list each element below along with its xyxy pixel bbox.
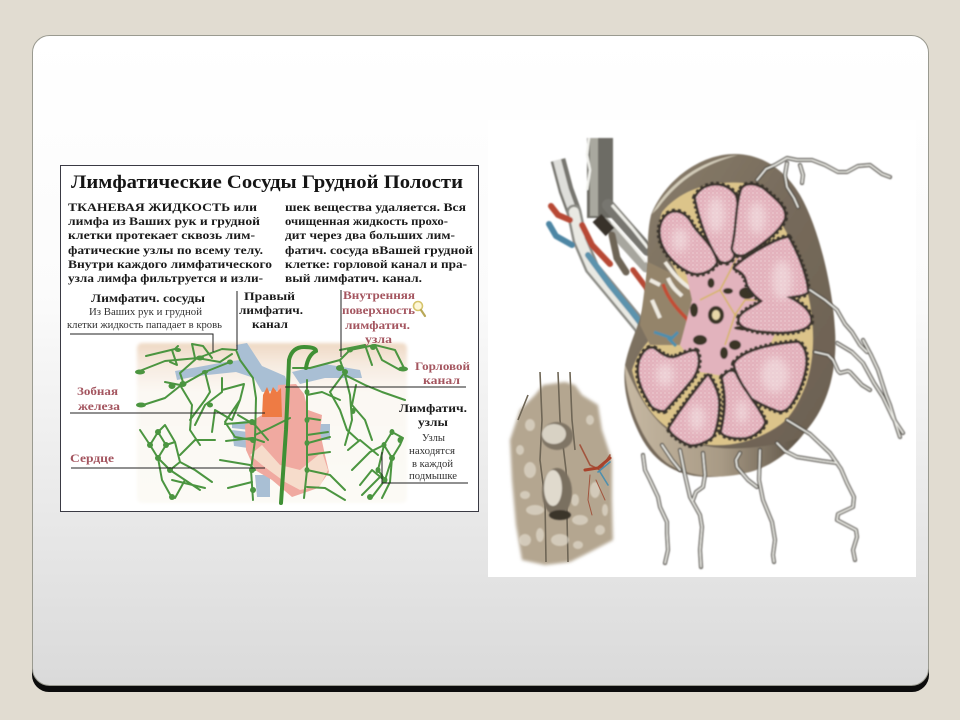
callout leader lines <box>70 290 468 483</box>
label: heart: Сердце <box>70 451 115 465</box>
label: right lymph duct: канал <box>252 317 288 331</box>
label: lymph nodes <box>399 401 467 482</box>
title: Лимфатические Сосуды Грудной Полости <box>71 173 463 193</box>
panel: lymph node illustration <box>488 120 916 577</box>
label: right lymph duct: Правый <box>244 289 295 303</box>
thoracic duct <box>281 347 316 503</box>
small illustration: nodes in tissue <box>510 372 613 565</box>
thymus <box>262 387 282 417</box>
text block: left column: ТКАНЕВАЯ ЖИДКОСТЬ или <box>68 200 257 214</box>
label: right lymph duct: лимфатич. <box>239 303 303 317</box>
label: jugular duct: канал <box>423 373 460 387</box>
text block: right column: вый лимфатич. канал. <box>285 271 422 285</box>
lymph nodes <box>135 344 408 500</box>
label: inner surface of lymph node: поверхность <box>342 303 416 317</box>
text block: left column: фатические узлы по всему телу. <box>68 243 263 257</box>
lymph vessels <box>137 344 405 500</box>
label: jugular duct <box>415 359 470 387</box>
icon: magnifier <box>414 302 425 316</box>
chest diagram <box>135 343 408 503</box>
panel: lymphatic vessels of the chest <box>60 166 478 512</box>
label: right lymph duct <box>239 289 303 331</box>
vessels bundle at hilum <box>549 138 648 332</box>
label: lymph vessels: клетки жидкость пападает в кровь <box>67 320 222 331</box>
label: lymph vessels: Лимфатич. сосуды <box>91 291 206 305</box>
text block: right column: очищенная жидкость прохо- <box>285 214 448 228</box>
label: inner surface of lymph node <box>342 288 416 346</box>
text block: left column: Внутри каждого лимфатического <box>68 257 272 271</box>
label: thymus: Зобная <box>77 384 119 398</box>
upper node <box>541 422 573 450</box>
label: thymus <box>77 384 120 413</box>
label: lymph nodes: подмышке <box>409 471 458 482</box>
text block: right column: шек вещества удаляется. Вся <box>285 200 467 214</box>
text block: right column: фатич. сосуда вВашей грудной <box>285 243 473 257</box>
text block: left column <box>68 200 272 285</box>
medulla network <box>680 250 790 378</box>
small vessels <box>580 445 610 515</box>
text block: left column: лимфа из Ваших рук и грудной <box>68 214 260 228</box>
label: lymph nodes: Узлы <box>422 433 445 444</box>
text block: right column: клетке: горловой канал и пра- <box>285 257 467 271</box>
label: thymus: железа <box>78 399 120 413</box>
blue veins <box>175 343 362 497</box>
text block: left column: клетки протекает сквозь лим- <box>68 228 255 242</box>
node cortex base <box>632 182 813 445</box>
label: lymph vessels: Из Ваших рук и грудной <box>89 307 203 318</box>
label: lymph nodes: узлы <box>418 415 449 429</box>
label: lymph nodes: находятся <box>409 446 455 457</box>
heart <box>245 384 329 497</box>
afferent lymph vessels <box>643 158 903 567</box>
lobes of the cortex <box>639 185 810 444</box>
label: jugular duct: Горловой <box>415 359 470 373</box>
text block: right column <box>285 200 473 285</box>
diagram background <box>137 343 407 503</box>
label: inner surface of lymph node: лимфатич. <box>345 318 410 332</box>
lower node <box>542 468 572 520</box>
label: lymph nodes: Лимфатич. <box>399 401 467 415</box>
label: inner surface of lymph node: Внутренняя <box>343 288 416 302</box>
text block: left column: узла лимфа фильтруется и изли- <box>68 271 263 285</box>
label: inner surface of lymph node: узла <box>365 332 392 346</box>
node capsule <box>624 154 835 477</box>
text block: right column: дит через два больших лим- <box>285 228 455 242</box>
hilum region <box>640 262 700 346</box>
label: lymph nodes: в каждой <box>412 459 454 470</box>
label: lymph vessels <box>67 291 222 331</box>
